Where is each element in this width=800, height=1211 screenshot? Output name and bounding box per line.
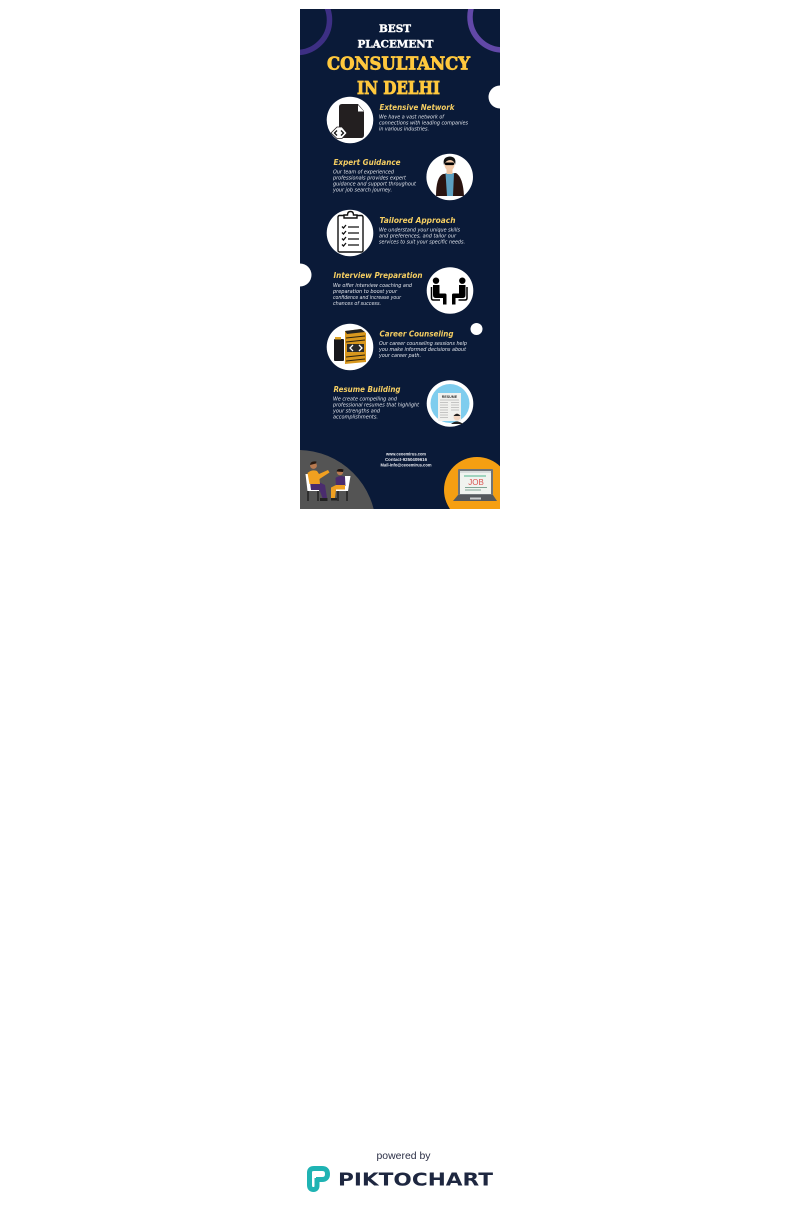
powered by label: powered by <box>376 1150 431 1162</box>
heading: Extensive Network <box>380 103 455 112</box>
text block: your strengths and <box>332 408 381 414</box>
item: Extensive Network <box>327 97 468 143</box>
heading: Tailored Approach <box>380 216 456 225</box>
text block: accomplishments. <box>333 414 378 420</box>
item: Resume Building <box>332 380 473 427</box>
icon: resume document <box>427 380 473 427</box>
text block: connections with leading companies <box>379 120 468 126</box>
item: Tailored Approach <box>327 210 465 256</box>
decorative dot: right <box>488 86 500 108</box>
text block: professionals provides expert <box>332 176 407 182</box>
left person <box>310 482 327 498</box>
icon: two people seated <box>427 267 473 314</box>
text block: you make informed decisions about <box>378 347 467 353</box>
text block: and preferences, and tailor our <box>379 234 457 240</box>
text block: your job search journey. <box>332 188 392 194</box>
heading: Expert Guidance <box>334 158 401 167</box>
text block: We offer interview coaching and <box>333 283 413 289</box>
text block: We understand your unique skills <box>379 228 460 234</box>
text block <box>378 341 468 359</box>
text block: confidence and increase your <box>333 295 402 301</box>
decorative dot: left <box>300 264 312 286</box>
decorative dot: small <box>470 323 482 335</box>
text block <box>332 170 417 194</box>
text block: preparation to boost your <box>332 289 398 295</box>
contact details <box>380 451 432 467</box>
heading: Resume Building <box>334 385 401 394</box>
title: IN DELHI <box>357 79 440 99</box>
title <box>327 23 470 99</box>
title: PLACEMENT <box>358 38 434 50</box>
icon: resume document: RESUME <box>442 395 458 399</box>
heading: Interview Preparation <box>334 271 423 280</box>
text block: in various industries. <box>379 126 429 132</box>
item: Interview Preparation <box>332 267 473 314</box>
item: Career Counseling <box>327 324 468 370</box>
item: Expert Guidance <box>332 154 473 200</box>
icon: clipboard checklist <box>327 210 373 256</box>
decorative arc: top left <box>300 9 332 56</box>
icon: document with code badge <box>327 97 373 143</box>
icon: stacked books <box>327 324 373 370</box>
text block: chances of success. <box>333 301 381 307</box>
icon: man with sunglasses <box>426 154 473 200</box>
text block: Our career counseling sessions help <box>379 341 468 347</box>
title: CONSULTANCY <box>327 54 470 74</box>
title: BEST <box>379 23 411 35</box>
left chair <box>306 474 319 491</box>
icon: Piktochart logo <box>310 1168 328 1190</box>
decorative arc: top right <box>467 9 500 53</box>
illustration: job laptop: JOB <box>468 478 484 487</box>
text block: professional resumes that highlight <box>332 402 420 408</box>
illustration: job laptop <box>444 457 500 509</box>
Piktochart wordmark: PIKTOCHART <box>338 1170 493 1190</box>
heading: Career Counseling <box>380 330 454 338</box>
illustration: interview meeting <box>300 450 374 509</box>
text block: services to suit your specific needs. <box>379 240 465 246</box>
poster panel <box>300 9 500 509</box>
right chair <box>336 476 350 491</box>
text block: guidance and support throughout <box>333 182 417 188</box>
text block: your career path. <box>378 353 421 359</box>
text block <box>332 283 413 307</box>
text block: We have a vast network of <box>379 114 445 120</box>
contact details: Mail-info@ceoemirus.com <box>380 462 432 467</box>
right person <box>336 476 346 486</box>
contact details: www.ceoemirus.com <box>385 451 426 456</box>
text block <box>379 114 468 130</box>
text block: Our team of experienced <box>333 170 395 176</box>
text block: We create compelling and <box>333 396 398 402</box>
text block <box>332 396 420 420</box>
contact details: Contact-9250409616 <box>385 457 428 462</box>
text block <box>379 228 465 246</box>
